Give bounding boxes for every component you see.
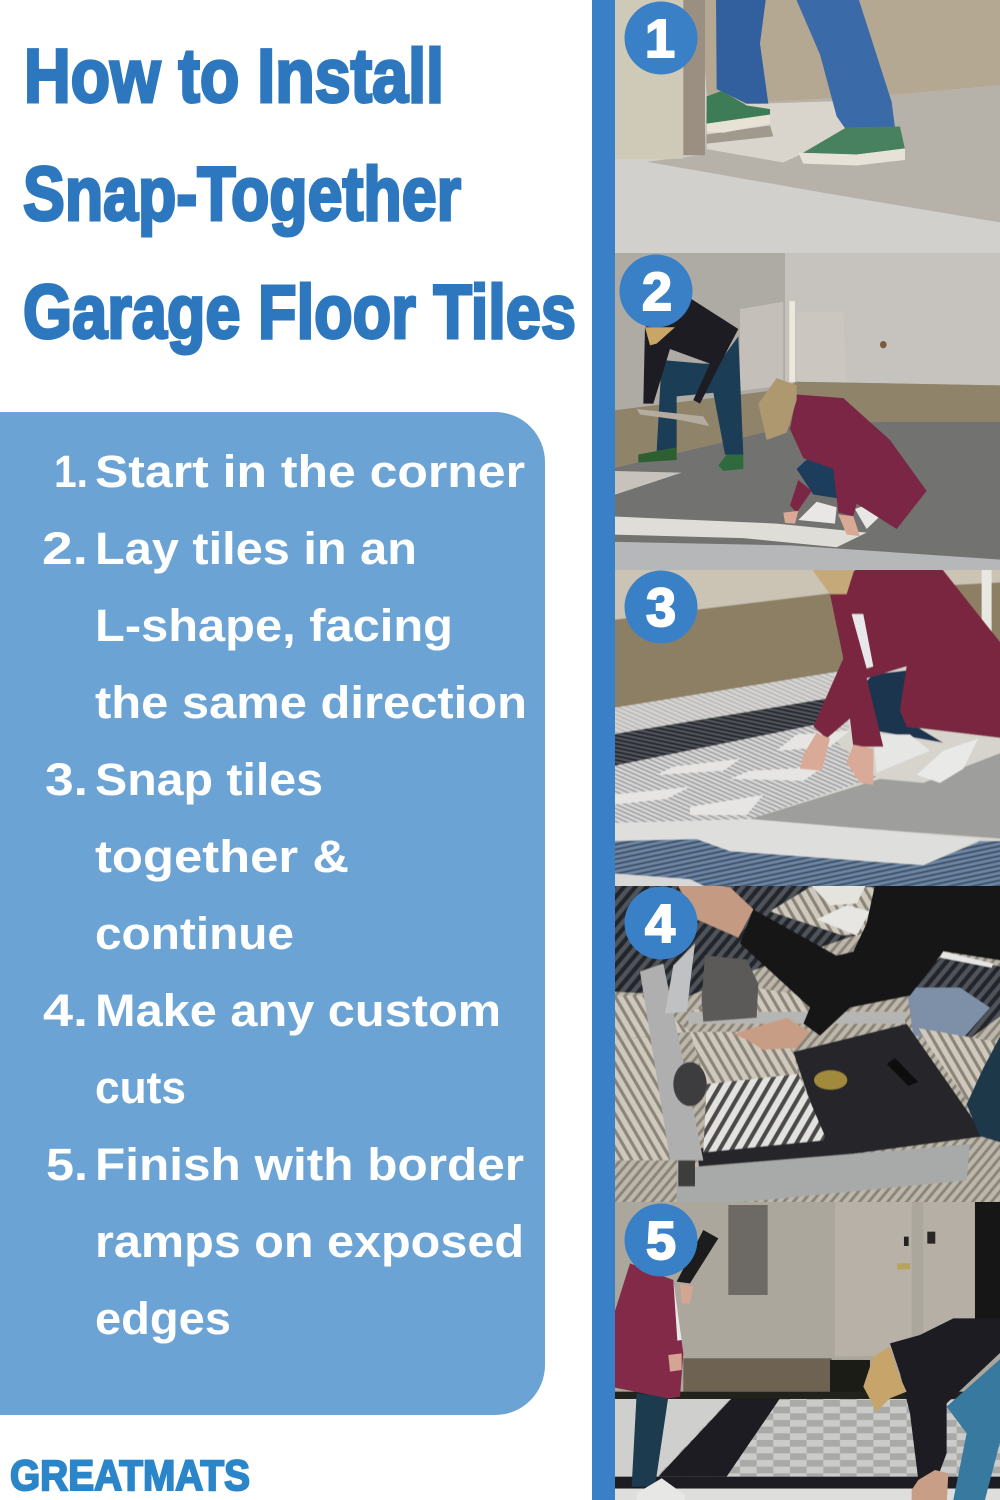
panel: installation steps — [0, 412, 545, 1415]
step 2 text: Lay tiles in an — [95, 523, 417, 574]
title: Garage Floor Tiles — [23, 270, 576, 355]
number badge 1: 1 — [645, 9, 675, 69]
number badge 3: 3 — [646, 578, 676, 638]
step 2 text: L-shape, facing — [95, 600, 453, 651]
blue vertical bar — [592, 0, 615, 1500]
number badge 4 — [624, 886, 698, 960]
step 5 text: Finish with border — [95, 1139, 524, 1190]
number badge 4: 4 — [645, 894, 675, 954]
number badge 2: 2 — [642, 262, 672, 322]
step 3 text: 3. — [45, 754, 88, 805]
title: Snap-Together — [23, 152, 461, 237]
step 4 text — [43, 985, 501, 1113]
arm in black sleeve — [673, 877, 1000, 1050]
step 2 text — [42, 523, 527, 728]
number badge 2 — [620, 254, 692, 328]
step 5 text: ramps on exposed — [95, 1216, 524, 1267]
number badge 3 — [624, 570, 698, 644]
photo 5: finishing with border ramps — [610, 1193, 1000, 1500]
step 2 text: the same direction — [95, 677, 527, 728]
woman in maroon coat — [800, 562, 1000, 785]
step 3 text: continue — [95, 908, 294, 959]
photo 4: making a custom cut with a tile cutter — [610, 877, 1000, 1209]
step 3 text — [45, 754, 349, 959]
number badge 5: 5 — [646, 1211, 676, 1271]
cutter base board — [697, 1024, 985, 1174]
woman holding ramps — [610, 1230, 718, 1500]
step 3 text: Snap tiles — [95, 754, 323, 805]
number badge 5 — [624, 1204, 698, 1276]
title: How to Install — [24, 34, 444, 119]
tile being cut — [690, 1032, 825, 1152]
step 1 text: Start in the corner — [95, 446, 525, 497]
title — [23, 34, 576, 355]
step 4 text: Make any custom — [95, 985, 501, 1036]
man in black jacket — [637, 298, 743, 471]
step 1 text: 1. — [54, 446, 88, 497]
step 5 text: 5. — [46, 1139, 88, 1190]
step 3 text: together & — [95, 831, 349, 882]
photo 3: snapping tiles together — [610, 562, 1000, 895]
step 5 text — [46, 1139, 524, 1344]
logo: Greatmats: GREATMATS — [10, 1452, 250, 1500]
cutter rail and handle — [640, 943, 905, 1186]
step 4 text: cuts — [95, 1062, 186, 1113]
step 2 text: 2. — [42, 523, 88, 574]
woman in maroon coat — [758, 378, 927, 536]
step 4 text: 4. — [43, 985, 88, 1036]
step 5 text: edges — [95, 1293, 231, 1344]
man bending over — [863, 1318, 1000, 1500]
number badge 1 — [624, 2, 698, 74]
panel background — [0, 412, 545, 1415]
photo 2: two people laying tiles in an L-shape — [610, 244, 1000, 578]
photo 1: green shoes and first tiles in the corner — [610, 0, 1000, 262]
white checker tiles — [610, 731, 850, 815]
